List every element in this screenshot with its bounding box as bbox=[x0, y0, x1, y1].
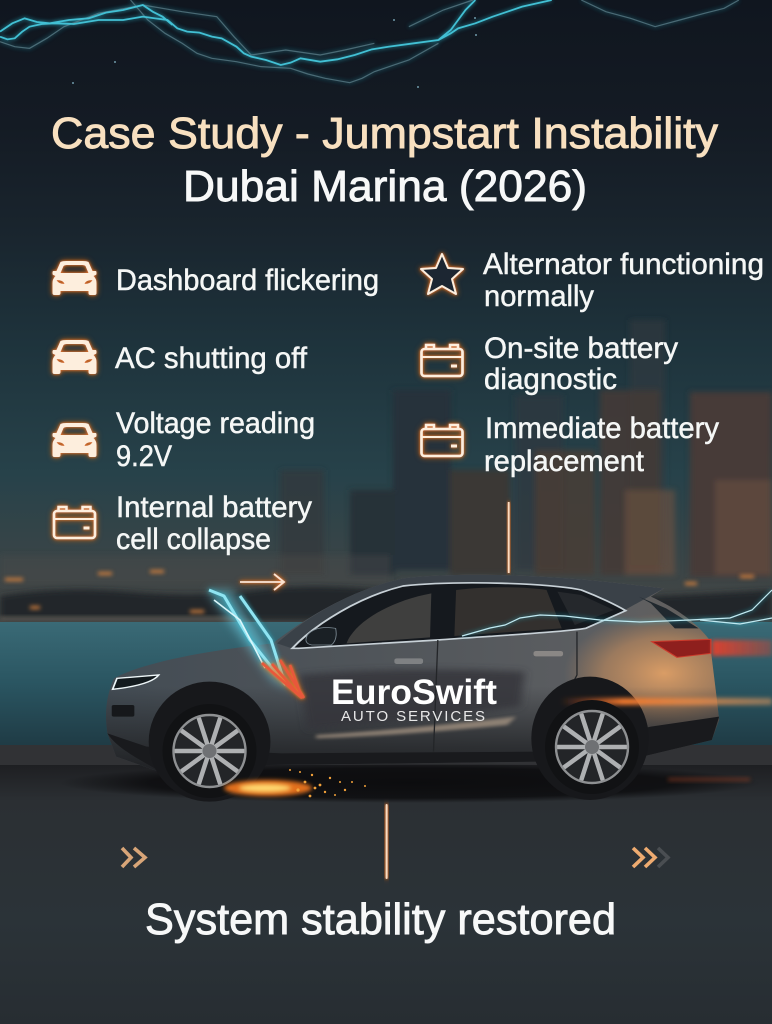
front door glass bbox=[347, 593, 431, 643]
front wheel bbox=[162, 704, 256, 798]
label: Voltage reading bbox=[116, 407, 315, 440]
roof shade bbox=[277, 575, 664, 648]
item: On-site battery diagnostic bbox=[422, 332, 678, 396]
icon: battery bbox=[54, 507, 95, 538]
car with logo bbox=[103, 575, 772, 802]
headlight bbox=[113, 675, 159, 689]
logo: AUTO SERVICES: AUTO SERVICES bbox=[341, 708, 485, 725]
background: water bbox=[0, 622, 772, 746]
icon: car bbox=[52, 261, 96, 295]
chevrons right bbox=[633, 848, 668, 867]
lightning on the car windows and right edge bbox=[462, 590, 772, 636]
logo: EuroSwift: EuroSwift bbox=[331, 673, 497, 712]
wheel arches bbox=[149, 682, 270, 802]
red clamp bbox=[262, 660, 304, 698]
background: lit shoreline bbox=[0, 570, 772, 620]
label: normally bbox=[484, 280, 594, 313]
rear wheel bbox=[545, 700, 639, 794]
item: AC shutting off bbox=[52, 340, 308, 375]
arrow: right-pointing bbox=[240, 574, 284, 590]
item: Alternator functioning normally bbox=[421, 248, 764, 313]
icon: car bbox=[52, 423, 96, 457]
label: AC shutting off bbox=[115, 342, 308, 375]
chevrons left bbox=[122, 848, 145, 867]
rear light streaks bbox=[560, 640, 772, 781]
closing statement: System stability restored bbox=[145, 895, 616, 944]
item: Internal battery cell collapse bbox=[54, 491, 312, 556]
mirror bbox=[306, 627, 336, 645]
icon: car bbox=[52, 340, 96, 374]
label: 9.2V bbox=[116, 440, 172, 473]
rear door glass bbox=[454, 587, 562, 636]
icon: battery bbox=[422, 345, 462, 376]
front grille bbox=[112, 705, 134, 717]
title bbox=[51, 109, 718, 211]
item: Immediate battery replacement bbox=[422, 412, 719, 478]
label: Immediate battery bbox=[485, 412, 719, 445]
label: cell collapse bbox=[116, 523, 271, 556]
label: On-site battery bbox=[484, 332, 678, 365]
item: Dashboard flickering bbox=[52, 261, 379, 297]
title line 1: Case Study - Jumpstart Instability bbox=[51, 109, 718, 158]
lower body shading bbox=[106, 690, 719, 770]
background: night sky bbox=[0, 0, 772, 625]
arrow: vertical connector to car roof bbox=[508, 502, 510, 573]
dark swoosh behind logo bbox=[299, 669, 525, 730]
rear window bbox=[639, 597, 699, 628]
icon: battery bbox=[422, 425, 462, 456]
background stars bbox=[72, 17, 477, 88]
arrow: vertical connector below car bbox=[386, 804, 388, 879]
orange light on rear quarter bbox=[570, 618, 718, 725]
background: curb and road bbox=[0, 745, 772, 1024]
icon: star bbox=[421, 254, 463, 294]
car body bbox=[106, 575, 719, 773]
door handles bbox=[394, 658, 423, 664]
background: Dubai Marina skyline bbox=[0, 320, 772, 585]
tail light bbox=[652, 639, 711, 657]
jumper clamp with electric arc bbox=[207, 590, 304, 698]
blue haze bbox=[207, 590, 292, 690]
label: Dashboard flickering bbox=[116, 264, 379, 297]
item: Voltage reading bbox=[52, 407, 315, 473]
title line 2: Dubai Marina (2026) bbox=[183, 162, 587, 211]
door seams bbox=[433, 632, 577, 752]
light swoosh below logo bbox=[316, 717, 516, 738]
blue arc bbox=[209, 590, 285, 684]
lightning bolts across the top bbox=[0, 0, 739, 83]
sparks under front wheel bbox=[224, 769, 366, 797]
label: Alternator functioning bbox=[483, 248, 764, 281]
label: replacement bbox=[484, 445, 645, 478]
rear quarter glass bbox=[557, 592, 614, 625]
label: Internal battery bbox=[116, 491, 312, 524]
window frame bbox=[292, 583, 626, 648]
label: diagnostic bbox=[484, 363, 617, 396]
lower sill bbox=[107, 717, 719, 773]
